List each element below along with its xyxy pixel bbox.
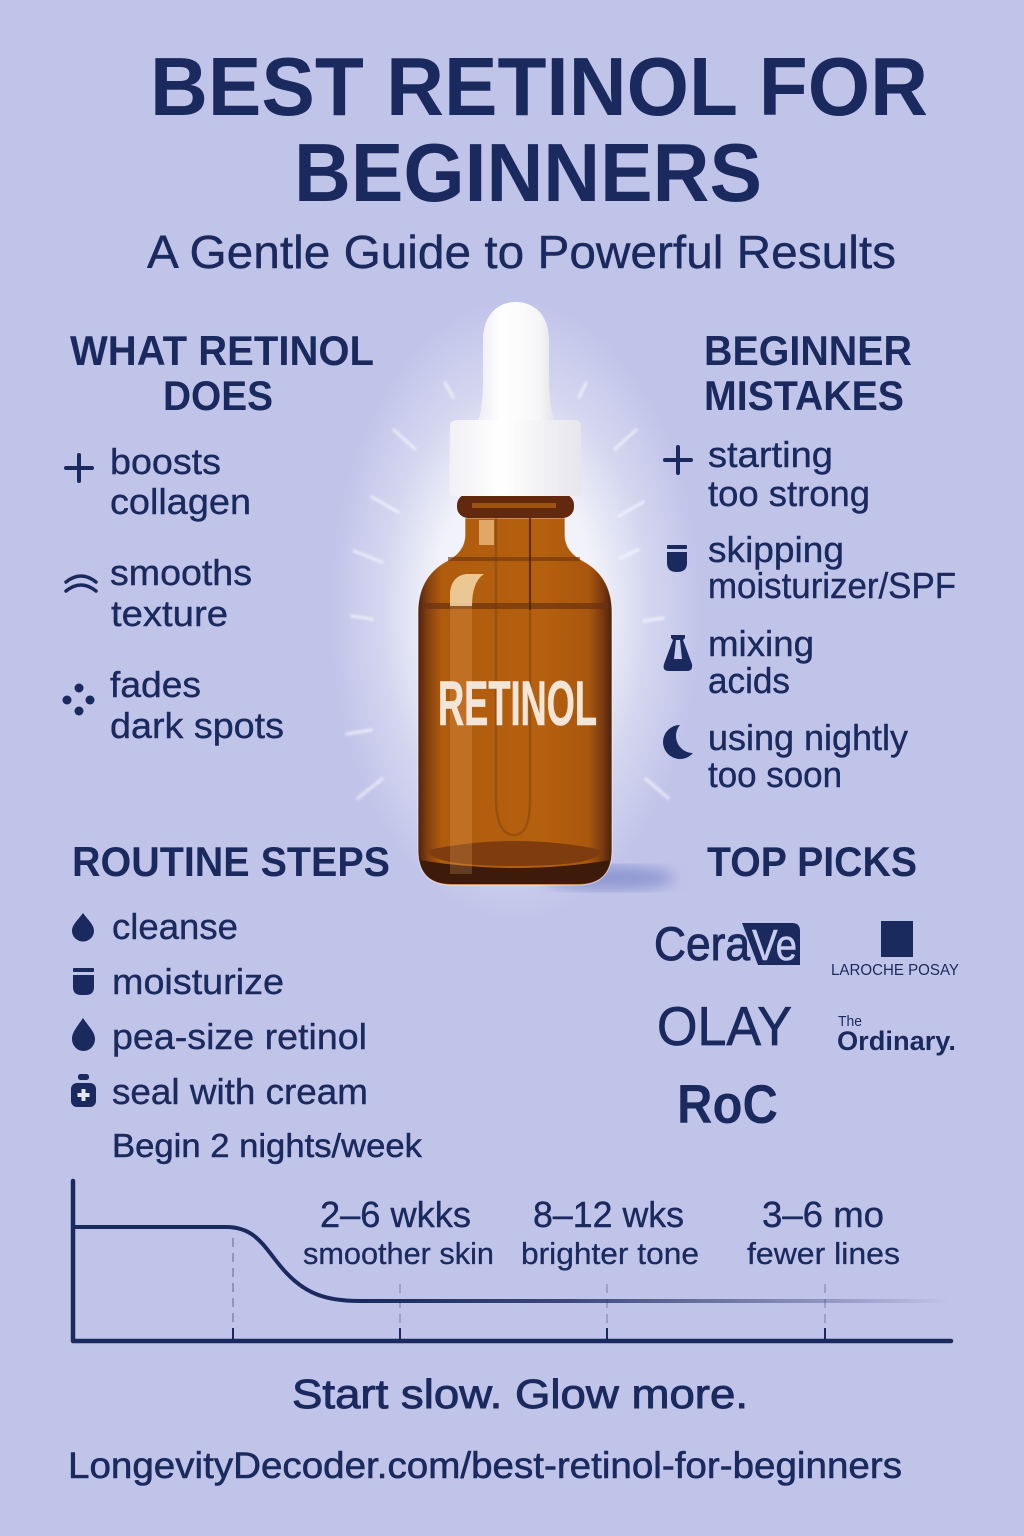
heading: DOES xyxy=(163,372,273,419)
heading xyxy=(704,327,912,419)
icon: dots xyxy=(62,684,94,716)
item: fades dark spots: dark spots xyxy=(110,705,284,746)
icon: drop xyxy=(72,913,94,942)
icon: drop xyxy=(72,1018,95,1051)
white collar cap xyxy=(449,420,581,496)
step: seal with cream: seal with cream xyxy=(112,1071,368,1112)
item: fades dark spots xyxy=(110,664,284,746)
panel: beginner mistakes xyxy=(663,327,956,795)
bottom pool xyxy=(428,841,602,866)
icon: plus xyxy=(665,447,691,473)
light rays xyxy=(347,383,668,798)
icon: plus xyxy=(66,455,92,481)
item: smooths texture: smooths xyxy=(110,552,252,593)
milestone: 8-12 weeks: brighter tone xyxy=(521,1236,699,1271)
heading xyxy=(70,327,374,419)
logo: CeraVe xyxy=(654,917,800,970)
item: mixing acids xyxy=(708,623,814,701)
step: cleanse: cleanse xyxy=(112,906,238,947)
item: starting too strong: too strong xyxy=(708,473,870,514)
step: pea-size retinol: pea-size retinol xyxy=(112,1016,367,1057)
shoulder band and fill line xyxy=(448,557,580,561)
results timeline chart xyxy=(73,1181,951,1341)
step: moisturize: moisturize xyxy=(112,961,284,1002)
dropper bulb xyxy=(478,302,555,421)
milestone: 3-6 months: 3–6 mo xyxy=(762,1194,884,1235)
icon: medicine cream jar xyxy=(71,1074,96,1107)
milestone: 2-6 weeks: smoother skin xyxy=(303,1236,494,1271)
fading curve tail xyxy=(360,1299,950,1303)
logo: Olay: OLAY xyxy=(657,995,792,1057)
icon: moon xyxy=(663,725,693,759)
website url: LongevityDecoder.com/best-retinol-for-beginners xyxy=(68,1445,902,1486)
panel: what retinol does xyxy=(62,327,374,746)
milestone: 3-6 months xyxy=(747,1194,900,1271)
logo: La Roche Posay: LAROCHE POSAY xyxy=(831,962,959,979)
item: using nightly too soon: too soon xyxy=(708,754,842,795)
subtitle: A Gentle Guide to Powerful Results xyxy=(147,226,896,278)
panel: routine steps xyxy=(71,838,423,1164)
glass bottle xyxy=(418,518,612,885)
milestone: 8-12 weeks xyxy=(521,1194,699,1271)
dropper tube xyxy=(496,518,530,835)
logo: La Roche Posay xyxy=(831,921,959,979)
item: using nightly too soon: using nightly xyxy=(708,717,908,758)
item: boosts collagen xyxy=(110,441,251,522)
axes xyxy=(73,1181,951,1341)
icon: flask xyxy=(664,635,692,671)
item: smooths texture xyxy=(110,552,252,634)
bottle label text: RETINOL xyxy=(438,669,597,739)
title: BEGINNERS xyxy=(294,126,762,219)
title xyxy=(150,40,928,219)
item: skipping moisturizer/SPF xyxy=(708,529,956,606)
item: using nightly too soon xyxy=(708,717,908,795)
logo: The Ordinary: The xyxy=(838,1013,862,1030)
item: starting too strong xyxy=(708,434,870,514)
heading: WHAT RETINOL xyxy=(70,327,374,374)
milestone: 8-12 weeks: 8–12 wks xyxy=(533,1194,684,1235)
heading: MISTAKES xyxy=(704,372,904,419)
ground shadow xyxy=(545,866,675,890)
item: skipping moisturizer/SPF: moisturizer/SPF xyxy=(708,565,956,606)
item: mixing acids: acids xyxy=(708,660,790,701)
milestone: 3-6 months: fewer lines xyxy=(747,1236,900,1271)
item: starting too strong: starting xyxy=(708,434,833,475)
logo: The Ordinary: Ordinary. xyxy=(837,1026,956,1056)
heading: ROUTINE STEPS xyxy=(72,838,390,885)
item: mixing acids: mixing xyxy=(708,623,814,664)
logo: RoC: RoC xyxy=(677,1073,778,1135)
heading: TOP PICKS xyxy=(707,838,917,885)
note: begin 2 nights per week: Begin 2 nights/week xyxy=(112,1127,423,1164)
bottle illustration xyxy=(330,300,700,920)
glass highlights xyxy=(450,574,484,606)
panel: top picks xyxy=(654,838,959,1135)
title: BEST RETINOL FOR xyxy=(150,40,928,133)
icon: smooth waves xyxy=(66,576,96,591)
icon: jar xyxy=(73,968,94,995)
item: boosts collagen: boosts xyxy=(110,441,221,482)
milestone: 2-6 weeks xyxy=(303,1194,494,1271)
tagline: Start slow. Glow more. xyxy=(292,1371,748,1417)
falling curve xyxy=(75,1227,360,1301)
neck ring xyxy=(457,494,574,518)
logo: The Ordinary xyxy=(837,1013,956,1056)
milestone: 2-6 weeks: 2–6 wkks xyxy=(320,1194,471,1235)
dashed milestone markers xyxy=(233,1238,825,1339)
logo: CeraVe: Ve xyxy=(752,921,797,970)
logo: CeraVe: Cera xyxy=(654,917,751,970)
item: smooths texture: texture xyxy=(111,593,228,634)
glow behind bottle xyxy=(330,300,700,920)
icon: jar xyxy=(667,545,687,572)
item: fades dark spots: fades xyxy=(110,664,201,705)
item: skipping moisturizer/SPF: skipping xyxy=(708,529,844,570)
item: boosts collagen: collagen xyxy=(110,481,251,522)
heading: BEGINNER xyxy=(704,327,912,374)
